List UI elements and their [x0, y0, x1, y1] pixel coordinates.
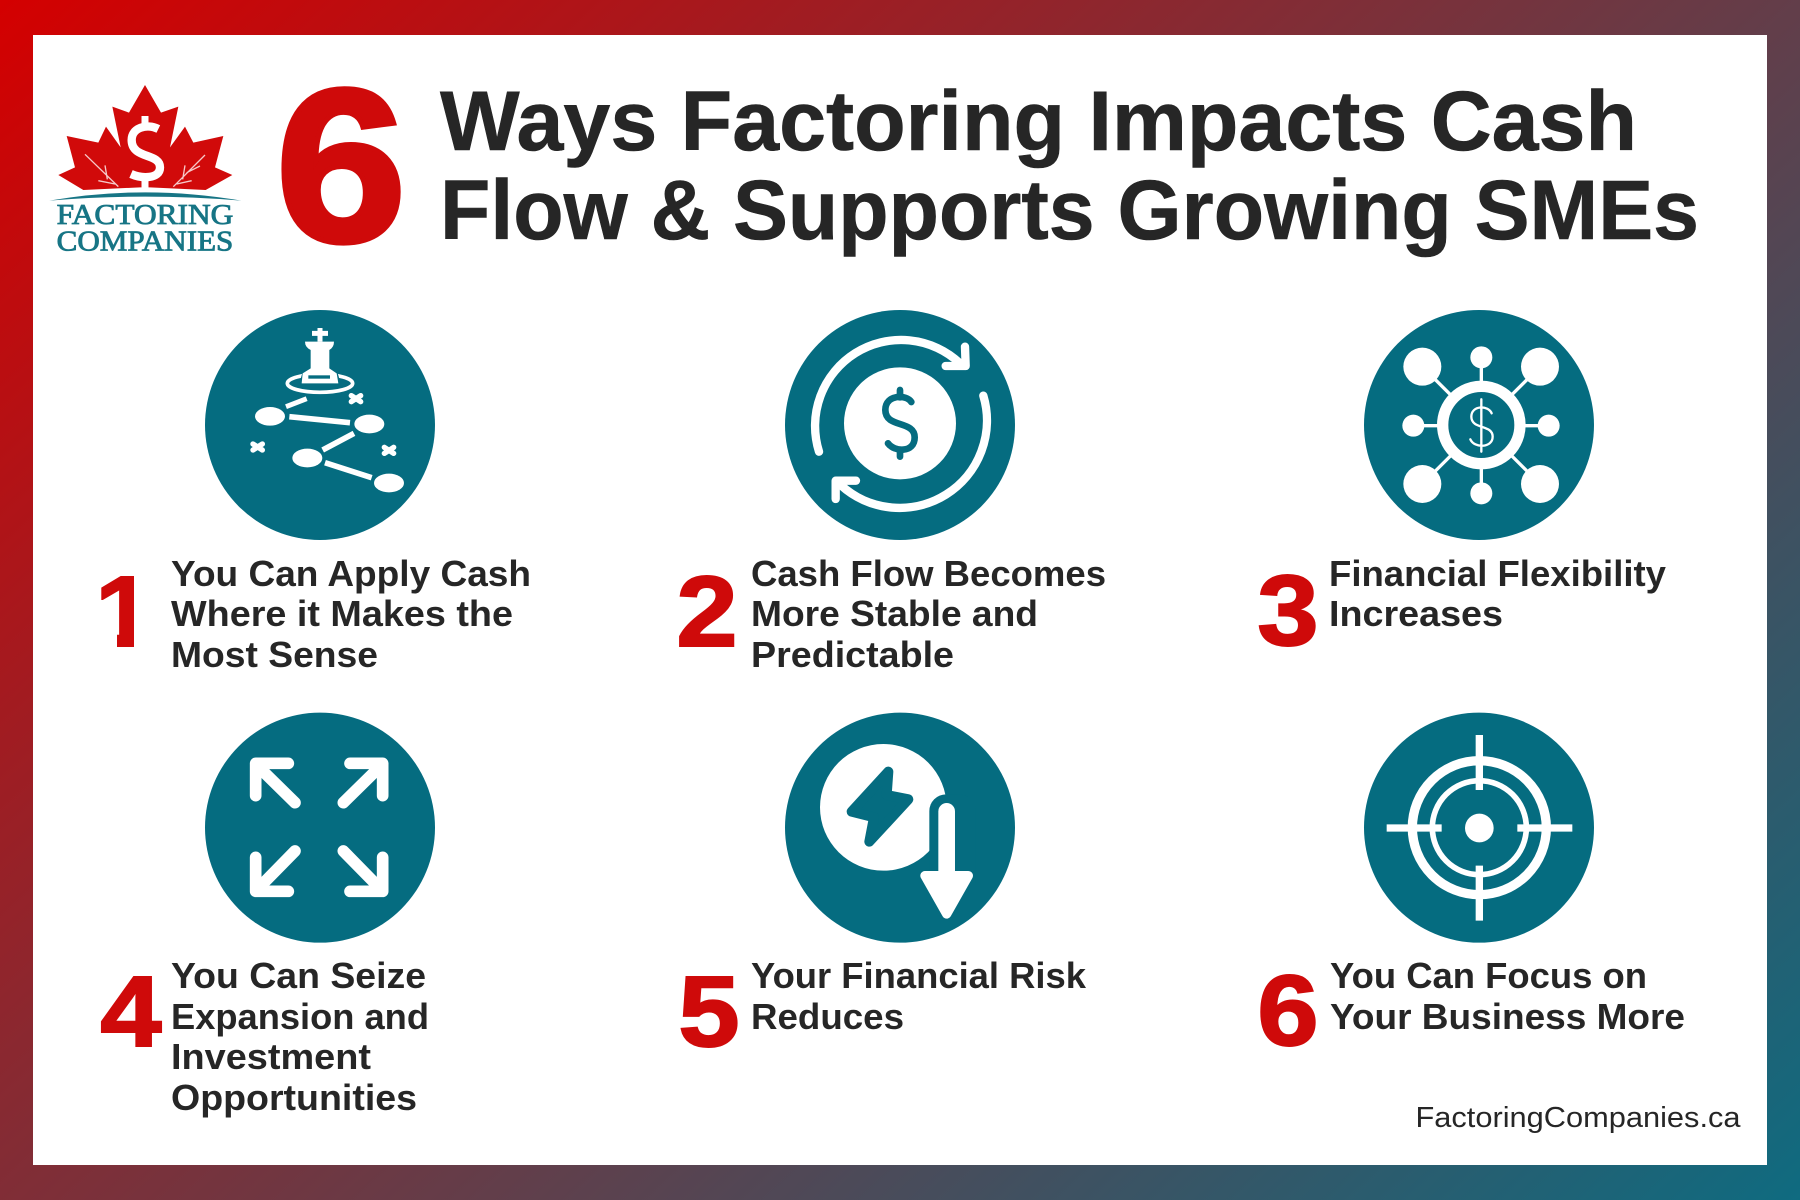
- title: Ways Factoring Impacts Cash: [440, 74, 1637, 168]
- icon: circular cash flow arrows: [785, 310, 1015, 540]
- text: item 2: Cash Flow Becomes: [751, 553, 1106, 594]
- logo: Factoring Companies maple leaf: FACTORING: [57, 200, 233, 231]
- number 3: 3: [1257, 556, 1319, 667]
- icon: lightning risk with down arrow: [785, 713, 1015, 943]
- text: item 5: [751, 955, 1087, 1037]
- text: item 3: Financial Flexibility: [1329, 553, 1666, 594]
- panel: item 4: [100, 713, 435, 1118]
- logo: Factoring Companies maple leaf: COMPANIES: [57, 226, 233, 258]
- title: Flow & Supports Growing SMEs: [440, 163, 1699, 257]
- number 2: 2: [676, 557, 738, 668]
- panel: item 1: [95, 310, 531, 675]
- text: item 2: Predictable: [751, 634, 954, 675]
- icon: target crosshair: [1364, 713, 1594, 943]
- panel: item 6: [1257, 713, 1685, 1067]
- text: item 6: Your Business More: [1330, 996, 1685, 1037]
- panel: item 5: [678, 713, 1087, 1068]
- title: [440, 74, 1699, 257]
- icon: chess king strategy map: [205, 310, 435, 540]
- text: item 1: [171, 553, 531, 675]
- number 6: 6: [1257, 956, 1319, 1067]
- text: item 6: You Can Focus on: [1330, 955, 1647, 996]
- text: item 5: Reduces: [751, 996, 904, 1037]
- text: item 5: Your Financial Risk: [751, 955, 1087, 996]
- big number 6: 6: [276, 45, 406, 288]
- panel: item 2: [676, 310, 1106, 675]
- number 1: 1: [95, 557, 155, 668]
- text: item 1: Where it Makes the: [171, 593, 513, 634]
- text: item 4: You Can Seize: [171, 955, 426, 996]
- text: item 1: Most Sense: [171, 634, 378, 675]
- website footer text: FactoringCompanies.ca: [1416, 1102, 1741, 1134]
- number 5: 5: [678, 957, 740, 1068]
- text: item 3: [1329, 553, 1666, 634]
- text: item 3: Increases: [1329, 593, 1503, 634]
- text: item 2: [751, 553, 1106, 675]
- text: item 1: You Can Apply Cash: [171, 553, 531, 594]
- text: item 4: Expansion and: [171, 996, 429, 1037]
- text: item 2: More Stable and: [751, 593, 1038, 634]
- text: item 4: Investment: [171, 1036, 371, 1077]
- icon: four expanding arrows: [205, 713, 435, 943]
- number 4: 4: [100, 957, 162, 1068]
- text: item 6: [1330, 955, 1685, 1037]
- text: item 4: Opportunities: [171, 1077, 417, 1118]
- logo: Factoring Companies maple leaf: [49, 85, 241, 258]
- text: item 4: [171, 955, 429, 1118]
- icon: dollar hub network: [1364, 310, 1594, 540]
- panel: item 3: [1257, 310, 1666, 667]
